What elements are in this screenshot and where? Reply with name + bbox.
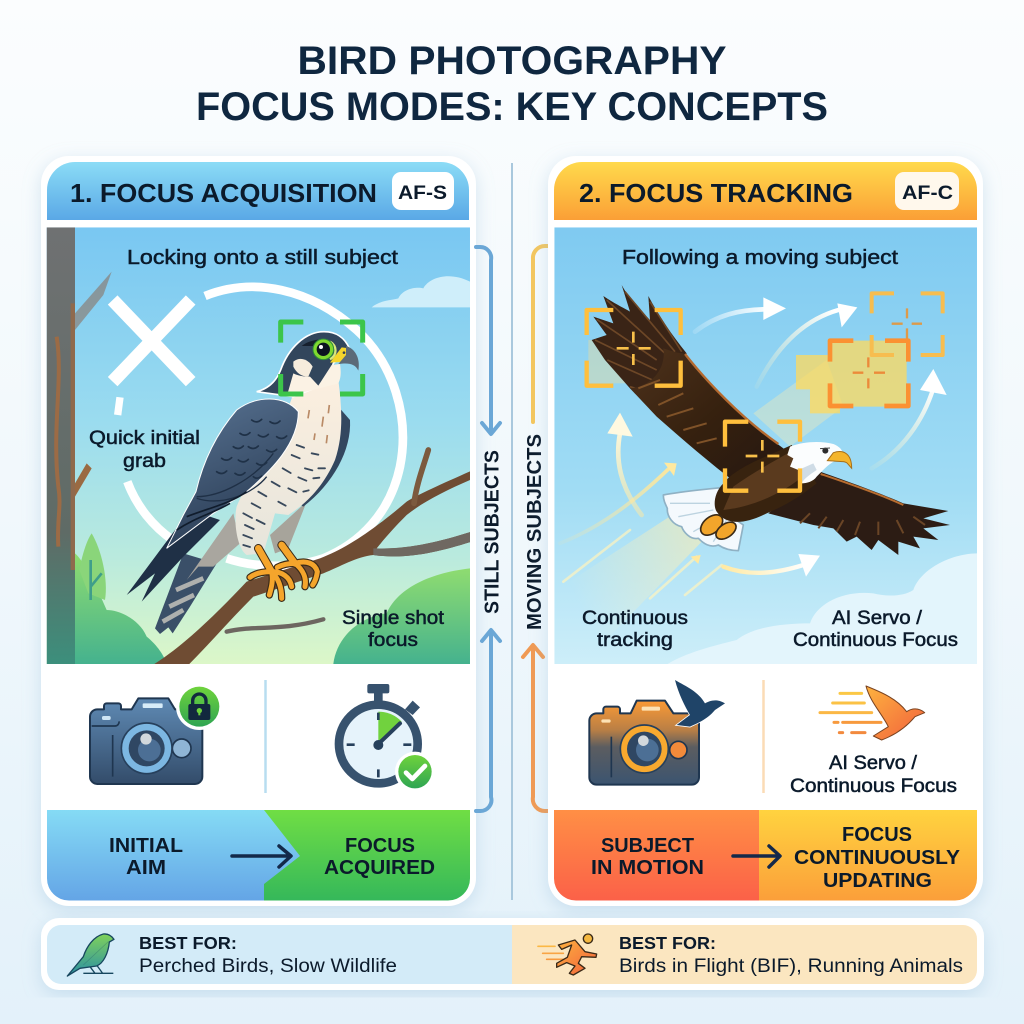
process bar: initial aim to focus acquired: INITIAL: [109, 835, 183, 857]
best for: moving subjects: BEST FOR:: [619, 933, 716, 953]
scene caption: following: Following a moving subject: [622, 247, 899, 269]
focus brackets: [587, 293, 943, 491]
eagle: [592, 285, 950, 555]
icon caption: AI servo: AI Servo /: [829, 753, 918, 774]
panel header: AF-C: [554, 162, 977, 220]
process bar: subject in motion to focus updating: CONTINUOUSLY: [794, 847, 961, 869]
panel header: AF-S: 1. FOCUS ACQUISITION: [70, 178, 377, 208]
vertical label: still subjects: STILL SUBJECTS: [482, 450, 504, 614]
scene caption: single shot focus: [342, 608, 445, 651]
icon: camera with lock: [90, 683, 223, 784]
title: BIRD PHOTOGRAPHY: [298, 39, 727, 83]
body: [715, 445, 817, 522]
scene caption: continuous tracking: [582, 608, 688, 651]
arrow: moving subjects up: [523, 645, 548, 811]
focus circle and X: [113, 287, 403, 566]
process bar: subject in motion to focus updating: FOCUS: [842, 824, 912, 846]
illustration: perched falcon scene: [47, 227, 472, 667]
tail: [663, 488, 743, 551]
icon: fast orange bird: [820, 686, 925, 740]
panel header: AF-C: AF-C: [902, 183, 953, 204]
falcon: [127, 332, 359, 634]
process bar: subject in motion to focus updating: UPDATING: [823, 870, 932, 892]
belly: [235, 380, 341, 555]
best-for strip: [41, 918, 984, 990]
process bar: initial aim to focus acquired: AIM: [126, 857, 166, 879]
panel header: AF-C: 2. FOCUS TRACKING: [579, 178, 853, 208]
panel header: AF-S: [47, 162, 469, 220]
arrow: still subjects down: [476, 247, 500, 434]
process bar: initial aim to focus acquired: FOCUS: [345, 835, 415, 857]
scene caption: quick initial grab: Quick initial: [89, 428, 200, 449]
main wing: [167, 399, 298, 548]
beak: [827, 452, 852, 468]
panel: focus tracking: [548, 156, 983, 906]
back wing: [302, 410, 350, 507]
lower wing: [768, 472, 950, 555]
scene caption: quick initial grab: [89, 428, 200, 472]
scene caption: single shot focus: Single shot: [342, 608, 445, 629]
process bar: subject in motion to focus updating: [554, 810, 977, 900]
process bar: subject in motion to focus updating: IN MOTION: [591, 857, 704, 879]
arrow: moving subjects top: [533, 246, 548, 422]
title: [196, 39, 828, 129]
best for: still subjects: [47, 925, 512, 984]
best for: still subjects: BEST FOR:: [139, 933, 237, 953]
panel header: AF-S: AF-S: [398, 183, 447, 204]
icon caption: AI servo: Continuous Focus: [790, 776, 957, 797]
icon: runner: [538, 934, 597, 975]
best for: moving subjects: [512, 925, 977, 984]
panel: focus acquisition: [41, 156, 476, 906]
best for: moving subjects: Birds in Flight (BIF), Running Animals: [619, 956, 963, 977]
cloud: [663, 553, 978, 667]
eye: [302, 340, 318, 346]
tail: [155, 553, 217, 634]
scene caption: single shot focus: focus: [368, 630, 418, 651]
icon: camera with bird: [589, 680, 725, 785]
bushes: [75, 553, 167, 664]
upper wing: [630, 348, 790, 483]
branches: [150, 471, 472, 667]
best for: still subjects: Perched Birds, Slow Wildlife: [139, 956, 397, 977]
icon: stopwatch with check: [339, 684, 435, 792]
scene caption: continuous tracking: Continuous: [582, 608, 688, 629]
head: [257, 332, 349, 397]
scene caption: locking: Locking onto a still subject: [127, 247, 399, 269]
scene caption: AI servo: Continuous Focus: [793, 630, 958, 651]
legs and talons: [250, 545, 317, 598]
scene caption: quick initial grab: grab: [123, 451, 166, 472]
highlight rectangles: [796, 341, 907, 413]
vertical label: moving subjects: MOVING SUBJECTS: [524, 434, 546, 630]
upper wing feather fan: [592, 285, 687, 390]
scene caption: AI servo: [793, 608, 958, 651]
focus brackets: green: [281, 322, 363, 394]
cloud: [372, 276, 470, 307]
arrow: still subjects up: [476, 630, 500, 811]
scene caption: AI servo: AI Servo /: [832, 608, 923, 629]
icon: perched bird: [67, 934, 114, 976]
process bar: subject in motion to focus updating: SUBJECT: [601, 835, 694, 857]
scene caption: continuous tracking: tracking: [597, 630, 673, 651]
process bar: initial aim to focus acquired: ACQUIRED: [324, 857, 435, 879]
illustration: eagle in flight scene: [554, 227, 978, 667]
title: FOCUS MODES: KEY CONCEPTS: [196, 85, 828, 129]
process bar: initial aim to focus acquired: [47, 810, 470, 900]
icon caption: AI servo: [790, 753, 957, 797]
head: [787, 442, 843, 483]
feet: [700, 514, 724, 536]
motion beams: [590, 518, 702, 620]
beak: [330, 347, 346, 363]
motion arrows: [560, 309, 933, 598]
